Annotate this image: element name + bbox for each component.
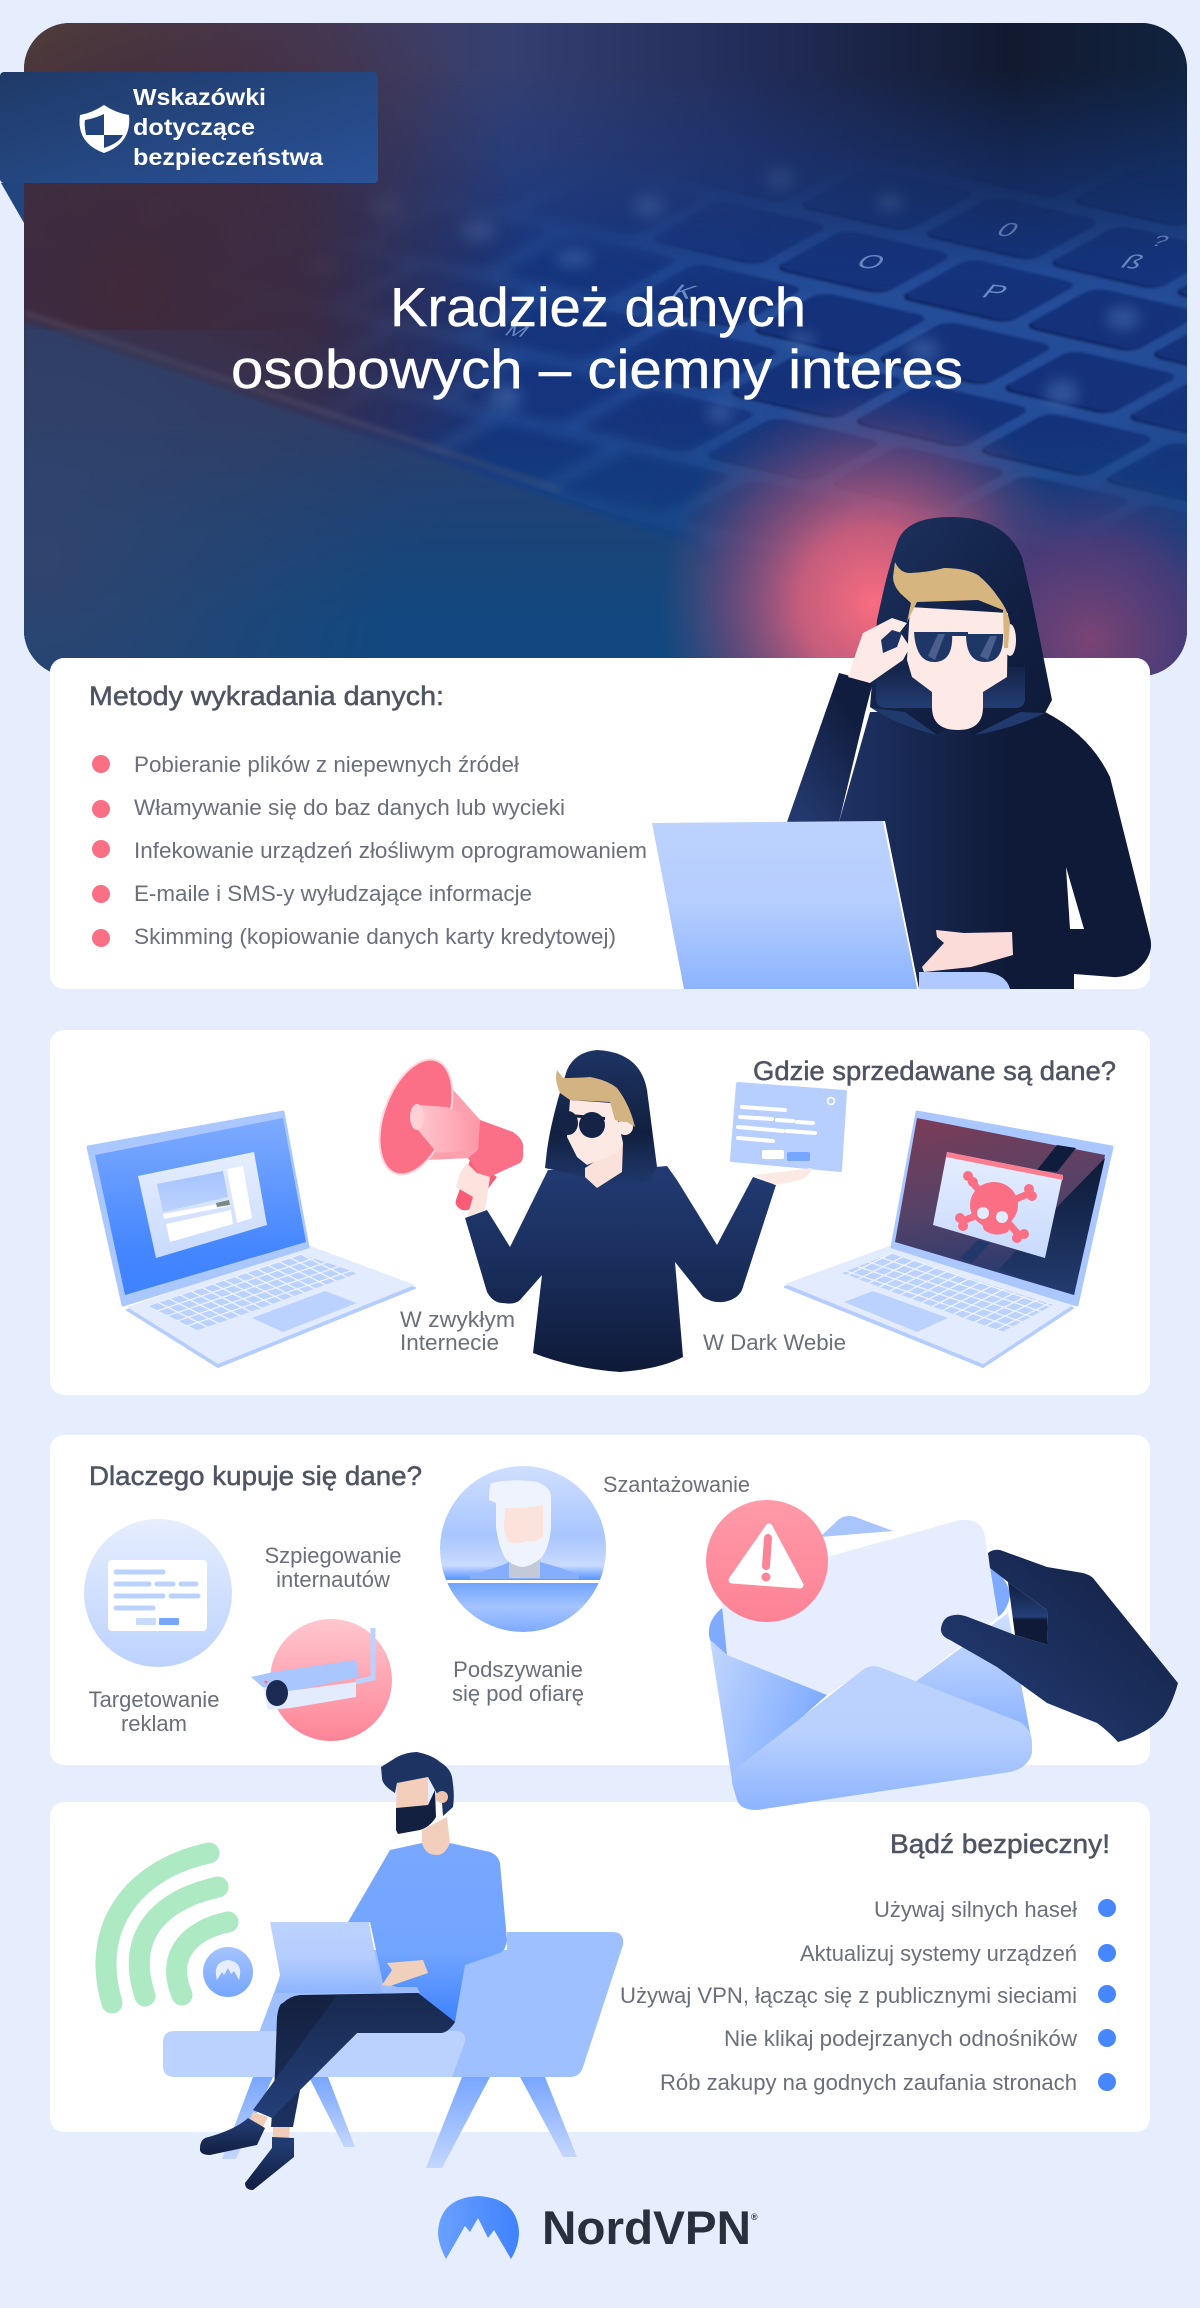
list: safety tips: Używaj VPN, łącząc się z publicznymi sieciami — [620, 1983, 1077, 2008]
label: dark web: W Dark Webie — [703, 1330, 846, 1355]
title: osobowych – ciemny interes — [231, 338, 963, 400]
label: spying — [265, 1543, 401, 1592]
label: impersonation — [452, 1657, 584, 1706]
illustration: man with laptop on sofa — [163, 1752, 623, 2190]
icon: impersonation portrait circle — [440, 1466, 606, 1632]
badge text — [133, 84, 323, 170]
badge text: bezpieczeństwa — [133, 144, 323, 170]
man torso — [348, 1843, 507, 2022]
logo wordmark: NordVPN — [542, 2201, 751, 2254]
hands — [382, 1960, 428, 1986]
search form card — [732, 1084, 845, 1170]
icon: wifi arcs — [106, 1853, 228, 2003]
laptop — [652, 821, 917, 989]
illustration: hacker with laptop — [652, 517, 1151, 989]
keyboard key letters: P — [977, 280, 1014, 303]
NordVPN logo — [438, 2196, 758, 2259]
icon: NordVPN badge on wifi — [203, 1947, 253, 1997]
browser window — [138, 1152, 267, 1258]
heading: where sold: Gdzie sprzedawane są dane? — [753, 1056, 1116, 1086]
keyboard key letters: 0 — [991, 218, 1025, 241]
heading: stay safe: Bądź bezpieczny! — [890, 1829, 1110, 1859]
label: spying: internautów — [276, 1567, 390, 1592]
badge text: dotyczące — [133, 114, 255, 140]
list: methods: E-maile i SMS-y wyłudzające informacje — [134, 881, 532, 906]
keyboard key letters: ? — [1147, 232, 1174, 250]
letter — [720, 1520, 998, 1695]
illustration: hacker with megaphone and form — [365, 1050, 845, 1372]
logo mark — [438, 2196, 519, 2259]
list: safety tips: Rób zakupy na godnych zaufania stronach — [660, 2070, 1077, 2095]
label: ordinary internet: W zwykłym — [400, 1307, 515, 1332]
laptop: ordinary internet — [88, 1112, 415, 1367]
label: ordinary internet — [400, 1307, 515, 1355]
list: methods: Pobieranie plików z niepewnych źródeł — [134, 752, 519, 777]
list: safety tips: Aktualizuj systemy urządzeń — [800, 1941, 1077, 1966]
keyboard key letters: ß — [1116, 250, 1151, 273]
keyboard key letters: K — [666, 280, 703, 303]
shoes — [200, 2118, 294, 2190]
badge: safety tips — [0, 72, 378, 223]
icon: warning circle — [706, 1500, 828, 1622]
megaphone — [365, 1050, 523, 1217]
list: methods: Włamywanie się do baz danych lub wycieki — [134, 795, 565, 820]
icon: skull and crossbones — [955, 1171, 1037, 1243]
logo wordmark: ® — [751, 2212, 758, 2222]
label: spying: Szpiegowanie — [265, 1543, 401, 1568]
man legs — [253, 1993, 455, 2127]
title — [231, 276, 963, 400]
head — [381, 1752, 454, 1855]
hand under form — [755, 1168, 812, 1185]
title: Kradzież danych — [390, 276, 806, 338]
label: impersonation: Podszywanie — [453, 1657, 583, 1682]
keyboard key letters: O — [851, 250, 891, 273]
label: impersonation: się pod ofiarę — [452, 1681, 584, 1706]
hand on laptop — [922, 930, 1013, 972]
heading: methods: Metody wykradania danych: — [89, 681, 444, 711]
hero panel: keyboard photo — [0, 0, 1200, 683]
laptop — [270, 1922, 382, 1993]
illustration: envelope with warning and hand — [706, 1500, 1178, 1810]
list: methods — [92, 752, 647, 949]
keyboard key letters — [500, 218, 1174, 340]
label: ordinary internet: Internecie — [400, 1330, 499, 1355]
list: safety tips — [620, 1897, 1116, 2095]
icon: security camera circle — [251, 1619, 392, 1741]
laptop: dark web — [785, 1112, 1112, 1367]
sofa — [163, 1932, 623, 2168]
heading: why bought: Dlaczego kupuje się dane? — [89, 1461, 422, 1491]
label: ad targeting — [89, 1687, 219, 1736]
list: methods: Infekowanie urządzeń złośliwym oprogramowaniem — [134, 838, 647, 863]
sunglasses — [914, 632, 1003, 662]
panel: data theft methods — [50, 658, 1150, 989]
envelope panes — [710, 1640, 827, 1780]
label: ad targeting: Targetowanie — [89, 1687, 219, 1712]
panel: where data is sold — [50, 1030, 1150, 1395]
hand at glasses — [848, 618, 910, 683]
warning window — [933, 1152, 1063, 1258]
panel: stay safe — [50, 1802, 1150, 2132]
panel: why data is bought — [50, 1435, 1150, 1765]
ankles — [250, 2112, 290, 2138]
sunglasses — [558, 1111, 605, 1138]
badge text: Wskazówki — [133, 84, 266, 110]
icon: ad targeting circle — [84, 1519, 232, 1667]
gloved hand — [941, 1550, 1178, 1742]
icon: shield — [80, 105, 129, 153]
list: methods: Skimming (kopiowanie danych karty kredytowej) — [134, 924, 616, 949]
label: blackmail: Szantażowanie — [603, 1472, 750, 1497]
list: safety tips: Nie klikaj podejrzanych odnośników — [724, 2026, 1077, 2051]
label: ad targeting: reklam — [121, 1711, 187, 1736]
keyboard key letters: M — [500, 321, 534, 340]
list: safety tips: Używaj silnych haseł — [874, 1897, 1077, 1922]
